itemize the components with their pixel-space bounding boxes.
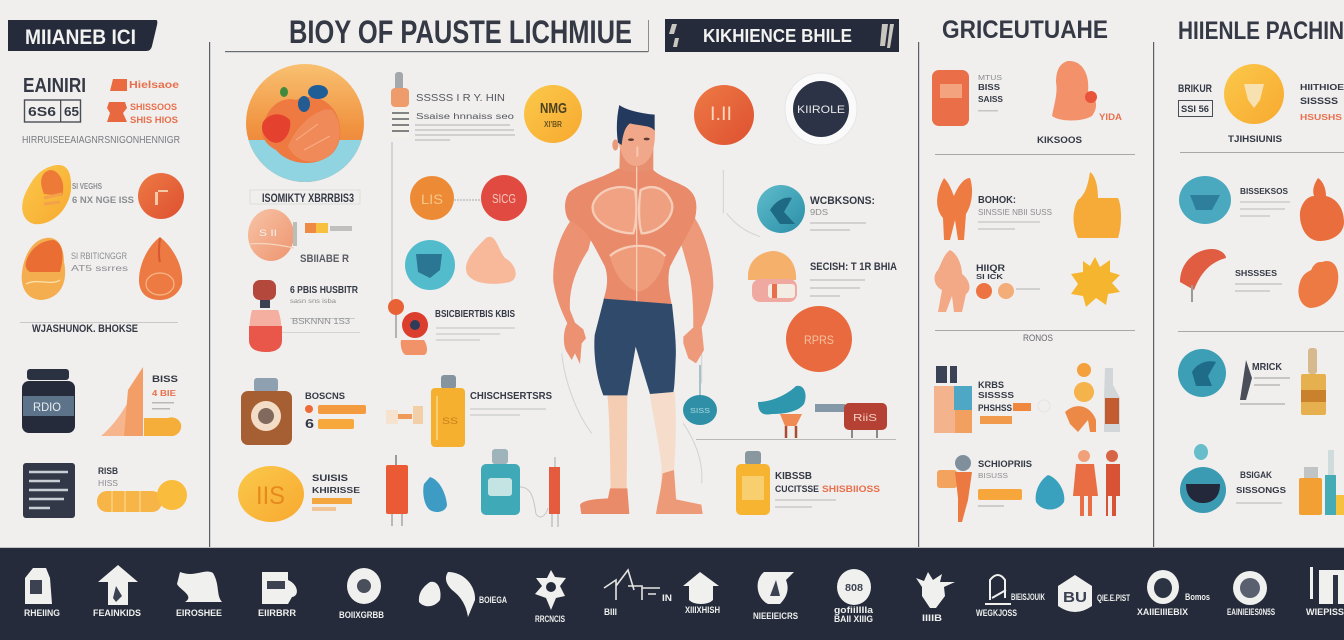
text: yellow bottle note bbox=[470, 391, 552, 415]
text: peach figure note: HIIQR bbox=[976, 263, 1006, 273]
footer item: branching diagram: IN bbox=[662, 593, 672, 603]
icon: teal bottle bbox=[481, 449, 520, 515]
text: organ note two: SI RBITICNGGR bbox=[71, 251, 127, 261]
footer item: report: RHEIING bbox=[24, 608, 60, 618]
icon: teal gauge bbox=[1179, 176, 1231, 224]
text: bowl note bbox=[1236, 470, 1287, 503]
stat block: top left: SHIS HIOS bbox=[130, 115, 178, 125]
man: legs bbox=[607, 392, 677, 500]
text: yellow blob note: KHIRISSE bbox=[312, 486, 361, 495]
footer item: seal: NIEEIEICRS bbox=[753, 611, 798, 621]
footer item: ring: XAIIEIIIEBIX bbox=[1137, 607, 1188, 617]
text: organ note one: SI VEGHS bbox=[72, 182, 103, 191]
text: figure note: BOHOK: bbox=[978, 195, 1016, 206]
icon: orange tank bbox=[932, 70, 969, 126]
text: teal note bbox=[810, 195, 875, 230]
subheading: left middle: WJASHUNOK. BHOKSE bbox=[32, 323, 138, 335]
stat block: top left: HIRRUISEEAIAGNRSNIGONHENNIGR bbox=[22, 135, 180, 146]
header tag: left panel bbox=[8, 20, 157, 51]
footer item: hut bbox=[683, 572, 720, 615]
footer item: hut: XIIIXHISH bbox=[685, 605, 720, 615]
caption: food circle: ISOMIKTY XBRRBIS3 bbox=[262, 191, 354, 205]
text: tool note bbox=[978, 459, 1032, 507]
stat block: top left: 65 bbox=[64, 104, 79, 119]
footer item: jar: BU bbox=[1063, 589, 1087, 606]
icon: blue blob bbox=[423, 477, 447, 512]
footer item: report bbox=[24, 568, 60, 618]
footer item: splash bbox=[535, 570, 566, 624]
icon: peach organ bbox=[466, 237, 516, 284]
panel: center right column bbox=[694, 73, 897, 515]
text: bowl note: SISSONGS bbox=[1236, 486, 1287, 495]
text: tool note: BISUSS bbox=[978, 473, 1008, 480]
icon: red bottle bbox=[249, 280, 282, 352]
text: yellow jar note: KIBSSB bbox=[775, 471, 812, 482]
connector: hose lines bbox=[562, 170, 760, 483]
icon: teal bowl bbox=[1180, 467, 1226, 513]
text: figure note: BSICBIERTBIS KBIS bbox=[435, 309, 515, 320]
icon: lab figures bbox=[1065, 363, 1120, 432]
icon: yellow capsule bar bbox=[97, 480, 187, 512]
label: peach bulb bbox=[300, 223, 352, 265]
footer item: tower bbox=[1306, 567, 1344, 617]
footer item: drop seal: gofiiIIIIa bbox=[834, 605, 874, 615]
connector: dotted link bbox=[454, 199, 481, 201]
text: tank note: MTUS bbox=[978, 75, 1002, 82]
man: neck and head bbox=[612, 105, 655, 183]
icon: peach bulb: S II bbox=[259, 228, 277, 238]
footer item: device: EIIRBRR bbox=[258, 608, 296, 618]
man: feet bbox=[580, 470, 703, 514]
callout: bottle note: Ssaise hnnaiss seo bbox=[416, 112, 515, 121]
icon: burger bun bbox=[748, 251, 797, 302]
man: left arm bbox=[553, 222, 593, 364]
icon: red circle badge bbox=[481, 175, 527, 221]
footer item: arch bbox=[976, 575, 1045, 618]
icon: bottle trio bbox=[1299, 450, 1344, 515]
text: yellow blob note: SUISIS bbox=[312, 473, 348, 483]
icon: yellow jar bbox=[736, 451, 770, 515]
label: peach bulb: SBIIABE R bbox=[300, 253, 349, 265]
footer item: device bbox=[258, 572, 297, 618]
panel: fourth column bbox=[1178, 64, 1344, 515]
man: right arm bbox=[677, 218, 713, 363]
footer item: coin bbox=[1227, 571, 1275, 617]
icon: small red figure bbox=[388, 299, 428, 355]
figure: muscular man bbox=[553, 105, 760, 514]
icon: orange red circle bbox=[694, 85, 754, 145]
icon: peach head bbox=[1052, 61, 1096, 120]
text: red bottle note: sasn sns isba bbox=[290, 299, 337, 305]
footer item: drop seal bbox=[834, 569, 874, 624]
text: disc note: HSUSHS bbox=[1300, 113, 1343, 122]
footer item: lungs bbox=[419, 572, 507, 617]
icon: orange figure bbox=[937, 178, 972, 240]
footer item: drop seal: BAII XIIIG bbox=[834, 614, 873, 624]
icon: orange circle: LIS bbox=[421, 191, 443, 207]
icon: small teal drop bbox=[1194, 444, 1208, 460]
text: umbrella note: SHSSSES bbox=[1235, 269, 1278, 278]
main title: BIOY OF PAUSTE LICHMIUE bbox=[289, 14, 632, 50]
footer item: branching diagram bbox=[604, 570, 672, 617]
subheading: fourth panel top: TJIHSIUNIS bbox=[1228, 134, 1282, 144]
label: peach head bbox=[1085, 91, 1123, 122]
footer item: jar: QIE.E.PIST bbox=[1097, 593, 1130, 603]
icon: orange circle bbox=[410, 176, 454, 220]
icon: red circle badge: SICG bbox=[492, 191, 516, 206]
text: card note: HISS bbox=[98, 479, 118, 488]
text: teal note: WCBKSONS: bbox=[810, 195, 875, 207]
text: peach figure note bbox=[976, 263, 1040, 299]
icon: teal circle bbox=[757, 185, 805, 233]
text: organ note one bbox=[72, 182, 134, 205]
icon: dark badge bbox=[785, 73, 857, 145]
text: gauge note: BISSEKSOS bbox=[1240, 187, 1289, 196]
icon: yellow circle badge bbox=[524, 85, 582, 143]
text: bun note bbox=[810, 261, 897, 296]
text: red bottle note bbox=[282, 285, 360, 333]
icon: orange sphere bbox=[786, 306, 852, 372]
icon: data card bbox=[23, 463, 75, 518]
text: teal circle note: MRICK bbox=[1252, 362, 1283, 373]
text: teal circle note bbox=[1240, 360, 1290, 404]
footer item: ring: Bomos bbox=[1185, 592, 1210, 602]
footer item: spiked shield bbox=[916, 572, 955, 623]
icon: teal circle two bbox=[1178, 349, 1226, 397]
stat block: fourth panel bbox=[1178, 83, 1212, 116]
text: bowl note: BSIGAK bbox=[1240, 470, 1272, 480]
text: bottle note bbox=[978, 380, 1050, 424]
footer item: bird: EIROSHEE bbox=[176, 608, 222, 618]
header banner: center right: KIKHIENCE BHILE bbox=[703, 26, 852, 46]
icon: dark badge: KIIROLE bbox=[797, 104, 845, 116]
icon: teal pendant: SISS bbox=[690, 408, 710, 415]
icon: yellow circle badge: NMG bbox=[540, 100, 567, 117]
chart: orange bars: BOSCNS bbox=[305, 391, 345, 401]
footer band bbox=[0, 547, 1344, 640]
footer item: tower: WIEPISS bbox=[1306, 607, 1344, 617]
footer item: seal bbox=[753, 572, 798, 621]
text: yellow bottle note: CHISCHSERTSRS bbox=[470, 391, 552, 402]
text: tank note bbox=[978, 75, 1004, 112]
callout: bottle note: SSSSS I R Y. HIN bbox=[416, 93, 505, 104]
footer item: lungs: BOIEGA bbox=[479, 595, 507, 605]
text: organ note one: 6 NX NGE ISS bbox=[72, 195, 134, 205]
icon: orange tool bbox=[937, 455, 972, 522]
footer item: jar bbox=[1058, 575, 1130, 612]
text: yellow jar note: CUCITSSE bbox=[775, 484, 819, 494]
icon: red pill: RiiS bbox=[853, 413, 877, 424]
icon: teal tool bbox=[758, 386, 806, 438]
text: figure note bbox=[435, 309, 515, 340]
panel: center left column bbox=[238, 64, 582, 527]
icon: orange peak chart bbox=[101, 367, 181, 436]
icon: amber bottle bbox=[1301, 348, 1326, 415]
text: teal note: 9DS bbox=[810, 208, 828, 217]
subheading: third panel middle: RONOS bbox=[1023, 333, 1053, 343]
text: yellow jar note: SHISBIIOSS bbox=[822, 484, 880, 494]
label: peach head: YIDA bbox=[1099, 112, 1123, 122]
text: tank note: BISS bbox=[978, 83, 1001, 92]
icon: brown jar bbox=[241, 378, 292, 445]
stat block: fourth panel: BRIKUR bbox=[1178, 83, 1212, 95]
icon: teal pendant bbox=[683, 365, 717, 425]
text: figure note bbox=[978, 195, 1052, 229]
text: disc note: SISSSS bbox=[1300, 96, 1338, 106]
icon: orange red circle: I.II bbox=[710, 104, 732, 125]
icon: pipette ticks bbox=[386, 406, 423, 424]
text: peak note bbox=[152, 374, 178, 410]
callout: bottle note bbox=[391, 72, 515, 140]
stat block: top left: SHISSOOS bbox=[130, 102, 177, 112]
panel: third column bbox=[932, 61, 1135, 522]
footer item: bird bbox=[176, 572, 222, 618]
stat block: top left: EAINIRI bbox=[23, 75, 86, 97]
icon: yellow burst bbox=[1071, 257, 1120, 307]
text: bun note: SECISH: T 1R BHIA bbox=[810, 261, 897, 273]
icon: red circle bbox=[138, 173, 184, 219]
footer item: arch: BIEISJOUIK bbox=[1011, 592, 1045, 602]
footer item: coin: EAINIEIES0N5S bbox=[1227, 607, 1275, 617]
footer item: drop seal: 808 bbox=[845, 583, 863, 594]
footer item: splash: RRCNCIS bbox=[535, 614, 565, 624]
footer item: spiked shield: IIIIB bbox=[922, 613, 943, 623]
text: bottle note: KRBS bbox=[978, 380, 1004, 390]
stat block: top left: Hielsaoe bbox=[129, 80, 180, 91]
footer item: wheel: BOIIXGRBB bbox=[339, 610, 384, 620]
text: umbrella note bbox=[1235, 269, 1282, 291]
icon: orange fruit bbox=[1300, 178, 1344, 241]
text: red bottle note: 6 PBIS HUSBITR bbox=[290, 285, 359, 296]
stat block: fourth panel: SSI 56 bbox=[1181, 104, 1209, 114]
icon: orange organ bbox=[22, 238, 65, 300]
text: disc note: HIITHIOE bbox=[1300, 83, 1344, 92]
footer item: arch: WEGKJOSS bbox=[976, 608, 1017, 618]
icon: teal blob bbox=[1036, 475, 1064, 510]
text: red bottle note: BSKNNN 1S3 bbox=[292, 317, 351, 326]
icon: red cylinder bbox=[386, 455, 408, 526]
connector: vertical guide bbox=[391, 142, 393, 306]
icon: supplement jar bbox=[22, 369, 75, 433]
illustration: food circle bbox=[246, 64, 364, 182]
text: peach figure note: SI ICK bbox=[976, 274, 1003, 281]
text: disc note bbox=[1300, 83, 1344, 122]
header tag: left panel: MIIANEB ICI bbox=[25, 26, 136, 49]
stat block: top left: 6S6 bbox=[28, 104, 56, 119]
caption: food circle bbox=[250, 190, 360, 205]
footer item: branching diagram: BIII bbox=[604, 607, 617, 617]
text: card note bbox=[98, 466, 118, 488]
text: bottle note: PHSHSS bbox=[978, 403, 1012, 413]
icon: blue circle bbox=[405, 240, 455, 290]
footer item: wheel bbox=[339, 568, 384, 620]
man: shorts bbox=[594, 299, 676, 395]
text: yellow jar note bbox=[775, 471, 880, 507]
icon: yellow blob: IIS bbox=[256, 482, 285, 510]
icon: yellow bottle bbox=[431, 375, 465, 447]
man: torso bbox=[565, 167, 696, 304]
chart: orange bars bbox=[305, 391, 366, 431]
icon: orange fruit two bbox=[1298, 261, 1338, 308]
footer item: ring bbox=[1137, 570, 1210, 617]
icon: red pill bbox=[815, 403, 887, 438]
text: bottle note: SISSSS bbox=[978, 391, 1015, 400]
icon: two orange figures bbox=[1073, 450, 1120, 516]
icon: orange leaf bbox=[139, 237, 182, 300]
icon: orange and teal bottles bbox=[934, 366, 972, 433]
text: figure note: SINSSIE NBII SUSS bbox=[978, 208, 1052, 217]
icon: yellow hand bbox=[1074, 172, 1121, 238]
text: organ note two: AT5 ssrres bbox=[71, 264, 128, 273]
icon: peach figure bbox=[935, 250, 969, 312]
text: yellow blob note bbox=[312, 473, 361, 511]
icon: peach bulb bbox=[248, 209, 297, 261]
icon: supplement jar: RDIO bbox=[33, 400, 61, 414]
icon: yellow blob bbox=[238, 466, 304, 522]
chart: orange bars: 6 bbox=[305, 416, 314, 431]
footer item: house arrow bbox=[93, 565, 141, 618]
icon: red tube bbox=[520, 457, 560, 527]
heading: third panel: GRICEUTUAHE bbox=[942, 16, 1108, 44]
text: tool note: SCHIOPRIIS bbox=[978, 459, 1032, 469]
text: card note: RISB bbox=[98, 466, 118, 476]
icon: orange sphere: RPRS bbox=[804, 333, 834, 347]
text: tank note: SAISS bbox=[978, 95, 1004, 104]
panel: left column bbox=[20, 75, 187, 518]
icon: yellow circle badge: XI'BR bbox=[544, 120, 562, 129]
text: gauge note bbox=[1240, 187, 1290, 216]
footer item: house arrow: FEAINKIDS bbox=[93, 608, 141, 618]
icon: yellow bottle: SS bbox=[442, 416, 458, 426]
text: peak note: BISS bbox=[152, 374, 178, 384]
subheading: third panel top: KIKSOOS bbox=[1037, 135, 1082, 145]
icon: orange disc bbox=[1224, 64, 1284, 124]
text: peak note: 4 BIE bbox=[152, 389, 177, 398]
icon: red umbrella bbox=[1180, 249, 1226, 302]
text: organ note two bbox=[71, 251, 128, 273]
icon: yellow organ bbox=[22, 165, 71, 224]
stat block: top left bbox=[22, 75, 180, 146]
header banner: center right bbox=[665, 19, 899, 52]
